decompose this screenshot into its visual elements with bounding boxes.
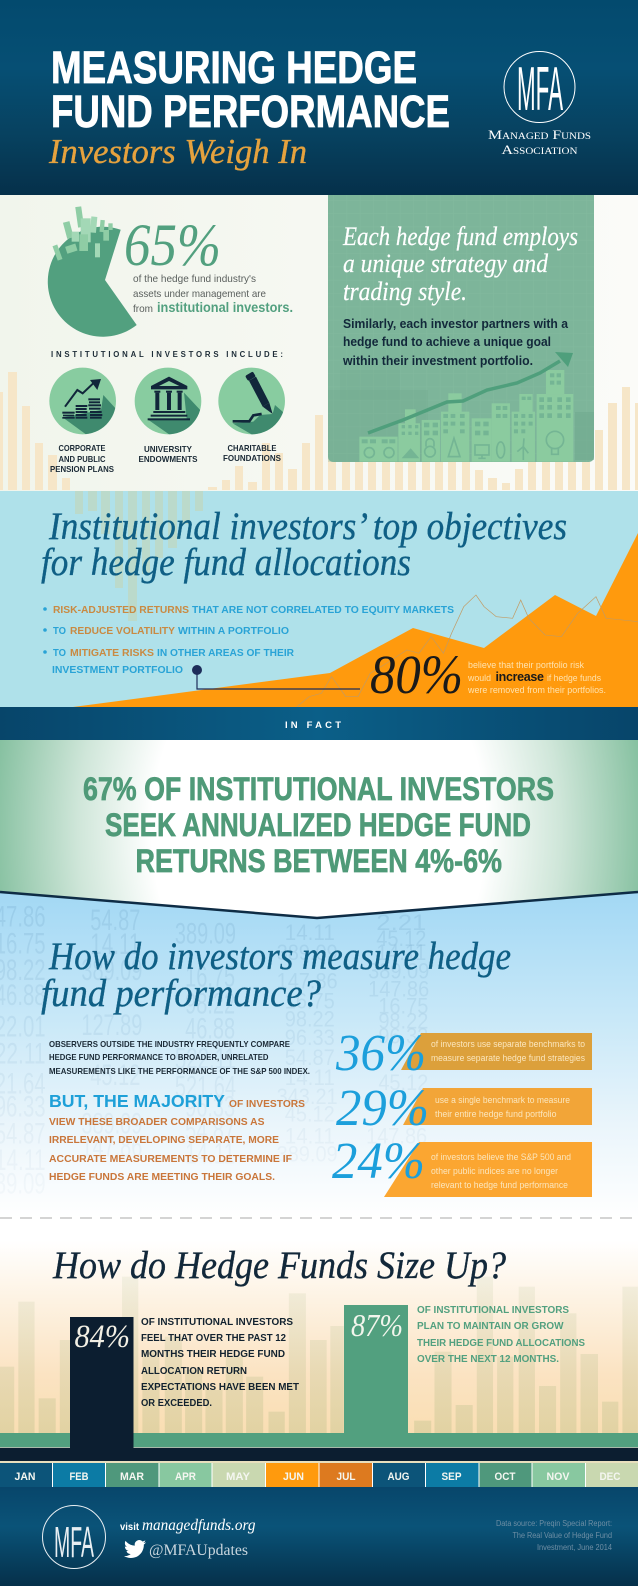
- panel body text: [342, 317, 569, 368]
- ground band: [0, 1433, 638, 1463]
- objectives list: INVESTMENT PORTFOLIO: [52, 664, 183, 676]
- text: 87 percent description: [417, 1305, 585, 1365]
- subtitle: Investors Weigh In: [48, 132, 307, 171]
- stat box: 29 percent: [336, 1080, 592, 1137]
- stat description: assets under management are: [133, 288, 266, 300]
- intro text: observers: [49, 1039, 310, 1076]
- background number pattern: 45.12: [378, 1071, 428, 1095]
- background number pattern: 147.86: [81, 1130, 142, 1163]
- stat description: risk increase: if hedge funds: [547, 673, 601, 683]
- background number pattern: 522.11: [175, 1041, 236, 1075]
- month timeline: FEB: [70, 1471, 89, 1483]
- background number pattern: 521.64: [175, 1070, 236, 1103]
- heading: institutional investors include: INSTITUTIONAL INVESTORS INCLUDE:: [51, 350, 283, 359]
- icon: corporate and public pension plans: [49, 368, 120, 437]
- title: [51, 42, 450, 137]
- footer logo: [42, 1506, 106, 1568]
- background number pattern: 389.09: [277, 1143, 338, 1167]
- heading: top objectives: Institutional investors’ top objectives: [48, 505, 567, 548]
- investor type labels: ENDOWMENTS: [138, 454, 198, 464]
- decorative peach bars: [0, 372, 638, 490]
- stat box: 29 percent: their entire hedge fund portfolio: [435, 1109, 557, 1119]
- background number pattern: 46.88: [185, 1011, 235, 1045]
- month timeline: OCT: [494, 1471, 516, 1483]
- icon: twitter bird: [124, 1540, 146, 1558]
- background number pattern: 16.75: [378, 994, 428, 1019]
- highlighted text: the majority: OF INVESTORS: [229, 1098, 305, 1110]
- website link: visit: [120, 1521, 139, 1533]
- stat box: 29 percent: use a single benchmark to measure: [435, 1095, 570, 1105]
- background number pattern: 98.22: [378, 1009, 428, 1034]
- investor type labels: PENSION PLANS: [50, 464, 114, 474]
- background number pattern: 54.87: [90, 903, 140, 936]
- callout text: [83, 771, 554, 879]
- stat: 80 percent: 80%: [370, 644, 463, 705]
- panel heading: a unique strategy and: [343, 249, 549, 278]
- heading: top objectives: for hedge fund allocations: [41, 541, 411, 584]
- background number pattern: 147.86: [368, 978, 429, 1002]
- stat box: 36 percent: [335, 1025, 592, 1082]
- stat box: 24 percent: of investors believe the S&P 500 and: [431, 1152, 571, 1162]
- heading: how do investors measure: fund performance?: [41, 972, 321, 1015]
- month timeline: JUN: [283, 1471, 304, 1483]
- footer logo: MFA: [54, 1518, 94, 1567]
- text: 87 percent description: OF INSTITUTIONAL INVESTORS: [417, 1305, 569, 1316]
- title: MEASURING HEDGE: [51, 42, 417, 93]
- twitter handle: @MFAUpdates: [149, 1542, 248, 1559]
- background number pattern: 147.86: [277, 970, 338, 994]
- stat box: 24 percent: relevant to hedge fund performance: [431, 1180, 568, 1190]
- stat description: from: [133, 303, 153, 315]
- background number pattern: 45.12: [285, 1103, 335, 1127]
- text: 84 percent description: MONTHS THEIR HEDGE FUND: [141, 1349, 285, 1360]
- highlighted text: the majority: [49, 1091, 305, 1183]
- stat description: risk increase: believe that their portfolio risk: [468, 660, 584, 670]
- objectives list: MITIGATE RISKS: [70, 647, 154, 659]
- background number pattern: 389.09: [81, 953, 142, 986]
- stat box: 29 percent: 29%: [336, 1080, 429, 1137]
- background number pattern: 96.33: [185, 1090, 235, 1123]
- background number pattern: 14.11: [285, 1124, 335, 1149]
- month timeline: MAY: [226, 1471, 251, 1483]
- band: in fact: IN FACT: [285, 720, 341, 731]
- text: 87 percent description: OVER THE NEXT 12 MONTHS.: [417, 1354, 559, 1365]
- month timeline: [0, 1463, 638, 1487]
- intro text: observers: HEDGE FUND PERFORMANCE TO BROADER, UNRELATED: [49, 1052, 268, 1062]
- stat description: of the hedge fund industry's: [133, 273, 256, 285]
- callout text: RETURNS BETWEEN 4%-6%: [136, 843, 502, 879]
- investor type labels: FOUNDATIONS: [223, 453, 281, 463]
- objectives list: RISK-ADJUSTED RETURNS: [53, 604, 189, 616]
- text: 87 percent description: PLAN TO MAINTAIN OR GROW: [417, 1321, 564, 1332]
- section: 67 percent callout: [0, 740, 638, 918]
- logo: Managed Funds Association: Managed Funds: [488, 127, 591, 142]
- section: how do investors measure background: [0, 885, 638, 1218]
- background number pattern: 343.21: [277, 1085, 338, 1109]
- objectives list: WITHIN A PORTFOLIO: [178, 625, 289, 637]
- background number pattern: 14.11: [90, 927, 140, 960]
- data source: Investment, June 2014: [537, 1543, 612, 1552]
- background number pattern: 45.12: [90, 1058, 140, 1091]
- icon: university endowments: [135, 368, 203, 437]
- objectives list: REDUCE VOLATILITY: [70, 625, 175, 637]
- investor type labels: CHARITABLE: [228, 443, 277, 453]
- panel: unique strategy: [328, 195, 594, 462]
- stat description: risk increase: increase: [496, 670, 544, 684]
- intro text: observers: OBSERVERS OUTSIDE THE INDUSTRY FREQUENTLY COMPARE: [49, 1039, 290, 1049]
- stat box: 24 percent: other public indices are no longer: [431, 1166, 558, 1176]
- stat: 65 percent: 65%: [124, 212, 221, 278]
- text: 84 percent description: EXPECTATIONS HAVE BEEN MET: [141, 1382, 299, 1393]
- stat box: 36 percent: measure separate hedge fund strategies: [431, 1053, 586, 1063]
- month timeline: JUL: [336, 1471, 356, 1483]
- highlighted text: the majority: HEDGE FUNDS ARE MEETING THEIR GOALS.: [49, 1171, 275, 1183]
- month timeline: DEC: [600, 1471, 621, 1483]
- background number pattern: 96.33: [285, 1026, 335, 1050]
- objectives list: THAT ARE NOT CORRELATED TO EQUITY MARKETS: [192, 604, 454, 616]
- band: in fact: [0, 707, 638, 740]
- heading: how do investors measure: [41, 935, 511, 1015]
- heading: how do hedge funds size up: How do Hedge Funds Size Up?: [52, 1244, 506, 1287]
- bar: 87 percent: 87%: [351, 1307, 403, 1343]
- investor type labels: [50, 443, 281, 474]
- background number pattern: 2.21: [376, 911, 426, 935]
- intro text: observers: MEASUREMENTS LIKE THE PERFORMANCE OF THE S&P 500 INDEX.: [49, 1066, 310, 1076]
- background number pattern: 14.11: [376, 941, 426, 965]
- connector line to 80 percent: [192, 665, 360, 689]
- panel body text: Similarly, each investor partners with a: [343, 317, 569, 331]
- highlighted text: the majority: VIEW THESE BROADER COMPARISONS AS: [49, 1116, 264, 1128]
- background number pattern: 14.11: [185, 1136, 235, 1170]
- text: 84 percent description: OF INSTITUTIONAL INVESTORS: [141, 1317, 293, 1328]
- footer: [0, 1487, 638, 1586]
- area chart: rising orange mountain: [73, 533, 638, 707]
- text: 84 percent description: OR EXCEEDED.: [141, 1398, 212, 1409]
- background number pattern: 98.22: [185, 986, 235, 1020]
- month timeline: AUG: [388, 1471, 410, 1483]
- month timeline: SEP: [442, 1471, 462, 1483]
- stat description: risk increase: [467, 660, 606, 695]
- text: 84 percent description: FEEL THAT OVER THE PAST 12: [141, 1333, 287, 1344]
- month timeline: JAN: [14, 1471, 36, 1483]
- background number pattern: 147.86: [366, 1124, 427, 1149]
- text: 84 percent description: [141, 1317, 299, 1409]
- panel body text: within their investment portfolio.: [342, 354, 533, 368]
- section background: institutional investors: [0, 195, 638, 492]
- stat box: 36 percent: 36%: [335, 1025, 426, 1082]
- background number pattern: 389.09: [175, 916, 236, 950]
- background number pattern: 16.75: [285, 989, 335, 1014]
- highlighted text: the majority: ACCURATE MEASUREMENTS TO DETERMINE IF: [49, 1153, 293, 1165]
- decorative skyline bars: [0, 1277, 638, 1433]
- highlighted text: the majority: IRRELEVANT, DEVELOPING SEPARATE, MORE: [49, 1134, 279, 1146]
- stat box: 24 percent: 24%: [332, 1133, 425, 1190]
- background number pattern: 14.11: [285, 921, 335, 945]
- investor type labels: AND PUBLIC: [58, 454, 106, 464]
- month timeline: MAR: [120, 1471, 144, 1483]
- callout text: SEEK ANNUALIZED HEDGE FUND: [105, 807, 531, 843]
- panel body text: hedge fund to achieve a unique goal: [343, 335, 551, 349]
- header banner: [0, 0, 638, 195]
- month timeline: NOV: [546, 1471, 570, 1483]
- bar: 87 percent: [344, 1305, 408, 1434]
- data source: Data source: Preqin Special Report:: [496, 1519, 612, 1528]
- data source: [496, 1519, 612, 1552]
- background number pattern: 16.75: [185, 960, 235, 993]
- objectives list: IN OTHER AREAS OF THEIR: [157, 647, 294, 659]
- decorative hanging bars: [75, 491, 203, 621]
- investor type labels: CORPORATE: [58, 443, 106, 453]
- icon: charitable foundations: [218, 368, 288, 437]
- background number pattern: 98.22: [285, 1008, 335, 1032]
- website link: managedfunds.org: [142, 1517, 256, 1534]
- month timeline: APR: [175, 1471, 196, 1483]
- stat description: institutional investors.: [157, 300, 293, 315]
- stat description: risk increase: would: [467, 673, 491, 683]
- text: 84 percent description: ALLOCATION RETURN: [141, 1366, 247, 1377]
- objectives list: TO: [53, 625, 66, 637]
- heading: how do investors measure: How do investors measure hedge: [48, 935, 511, 978]
- skyline on pie: [53, 206, 113, 261]
- arrow: rising trend: [368, 352, 573, 433]
- background number pattern: 389.09: [277, 941, 338, 965]
- stat box: 36 percent: of investors use separate benchmarks to: [431, 1039, 585, 1049]
- background number pattern: 127.89: [81, 1008, 142, 1041]
- stat description: [133, 273, 293, 315]
- stat box: 24 percent: [332, 1133, 592, 1197]
- pie chart: 65% share with skyline: [48, 206, 137, 337]
- panel heading: trading style.: [343, 277, 467, 306]
- stat description: risk increase: were removed from their portfolios.: [467, 685, 606, 695]
- logo: Managed Funds Association: Association: [502, 142, 578, 157]
- panel heading: [342, 222, 578, 306]
- title: FUND PERFORMANCE: [51, 86, 450, 137]
- background number pattern: 389.09: [81, 1106, 142, 1140]
- background number pattern: 54.87: [285, 1046, 335, 1070]
- section: size up background: [0, 1219, 638, 1435]
- highlighted text: the majority: BUT, THE MAJORITY: [49, 1091, 225, 1111]
- data source: The Real Value of Hedge Fund: [512, 1531, 612, 1540]
- background number pattern: 96.33: [378, 1024, 428, 1049]
- city skyline: [359, 370, 573, 462]
- bar: 84 percent: 84%: [74, 1319, 130, 1355]
- objectives list: [43, 604, 454, 676]
- background number pattern: [0, 900, 429, 1200]
- investor type labels: UNIVERSITY: [144, 444, 192, 454]
- bar: 84 percent: [70, 1317, 134, 1448]
- background number pattern: 14.11: [285, 1066, 335, 1090]
- objectives list: TO: [53, 647, 66, 659]
- callout text: 67% OF INSTITUTIONAL INVESTORS: [83, 771, 554, 807]
- panel heading: Each hedge fund employs: [342, 222, 578, 251]
- section: top objectives background: [0, 491, 638, 708]
- background number pattern: 45.12: [376, 927, 426, 951]
- text: 87 percent description: THEIR HEDGE FUND ALLOCATIONS: [417, 1338, 585, 1349]
- background number pattern: 54.87: [185, 1113, 235, 1146]
- heading: top objectives: [41, 505, 567, 584]
- background number pattern: 389.09: [368, 960, 429, 984]
- logo: Managed Funds Association: [488, 52, 591, 157]
